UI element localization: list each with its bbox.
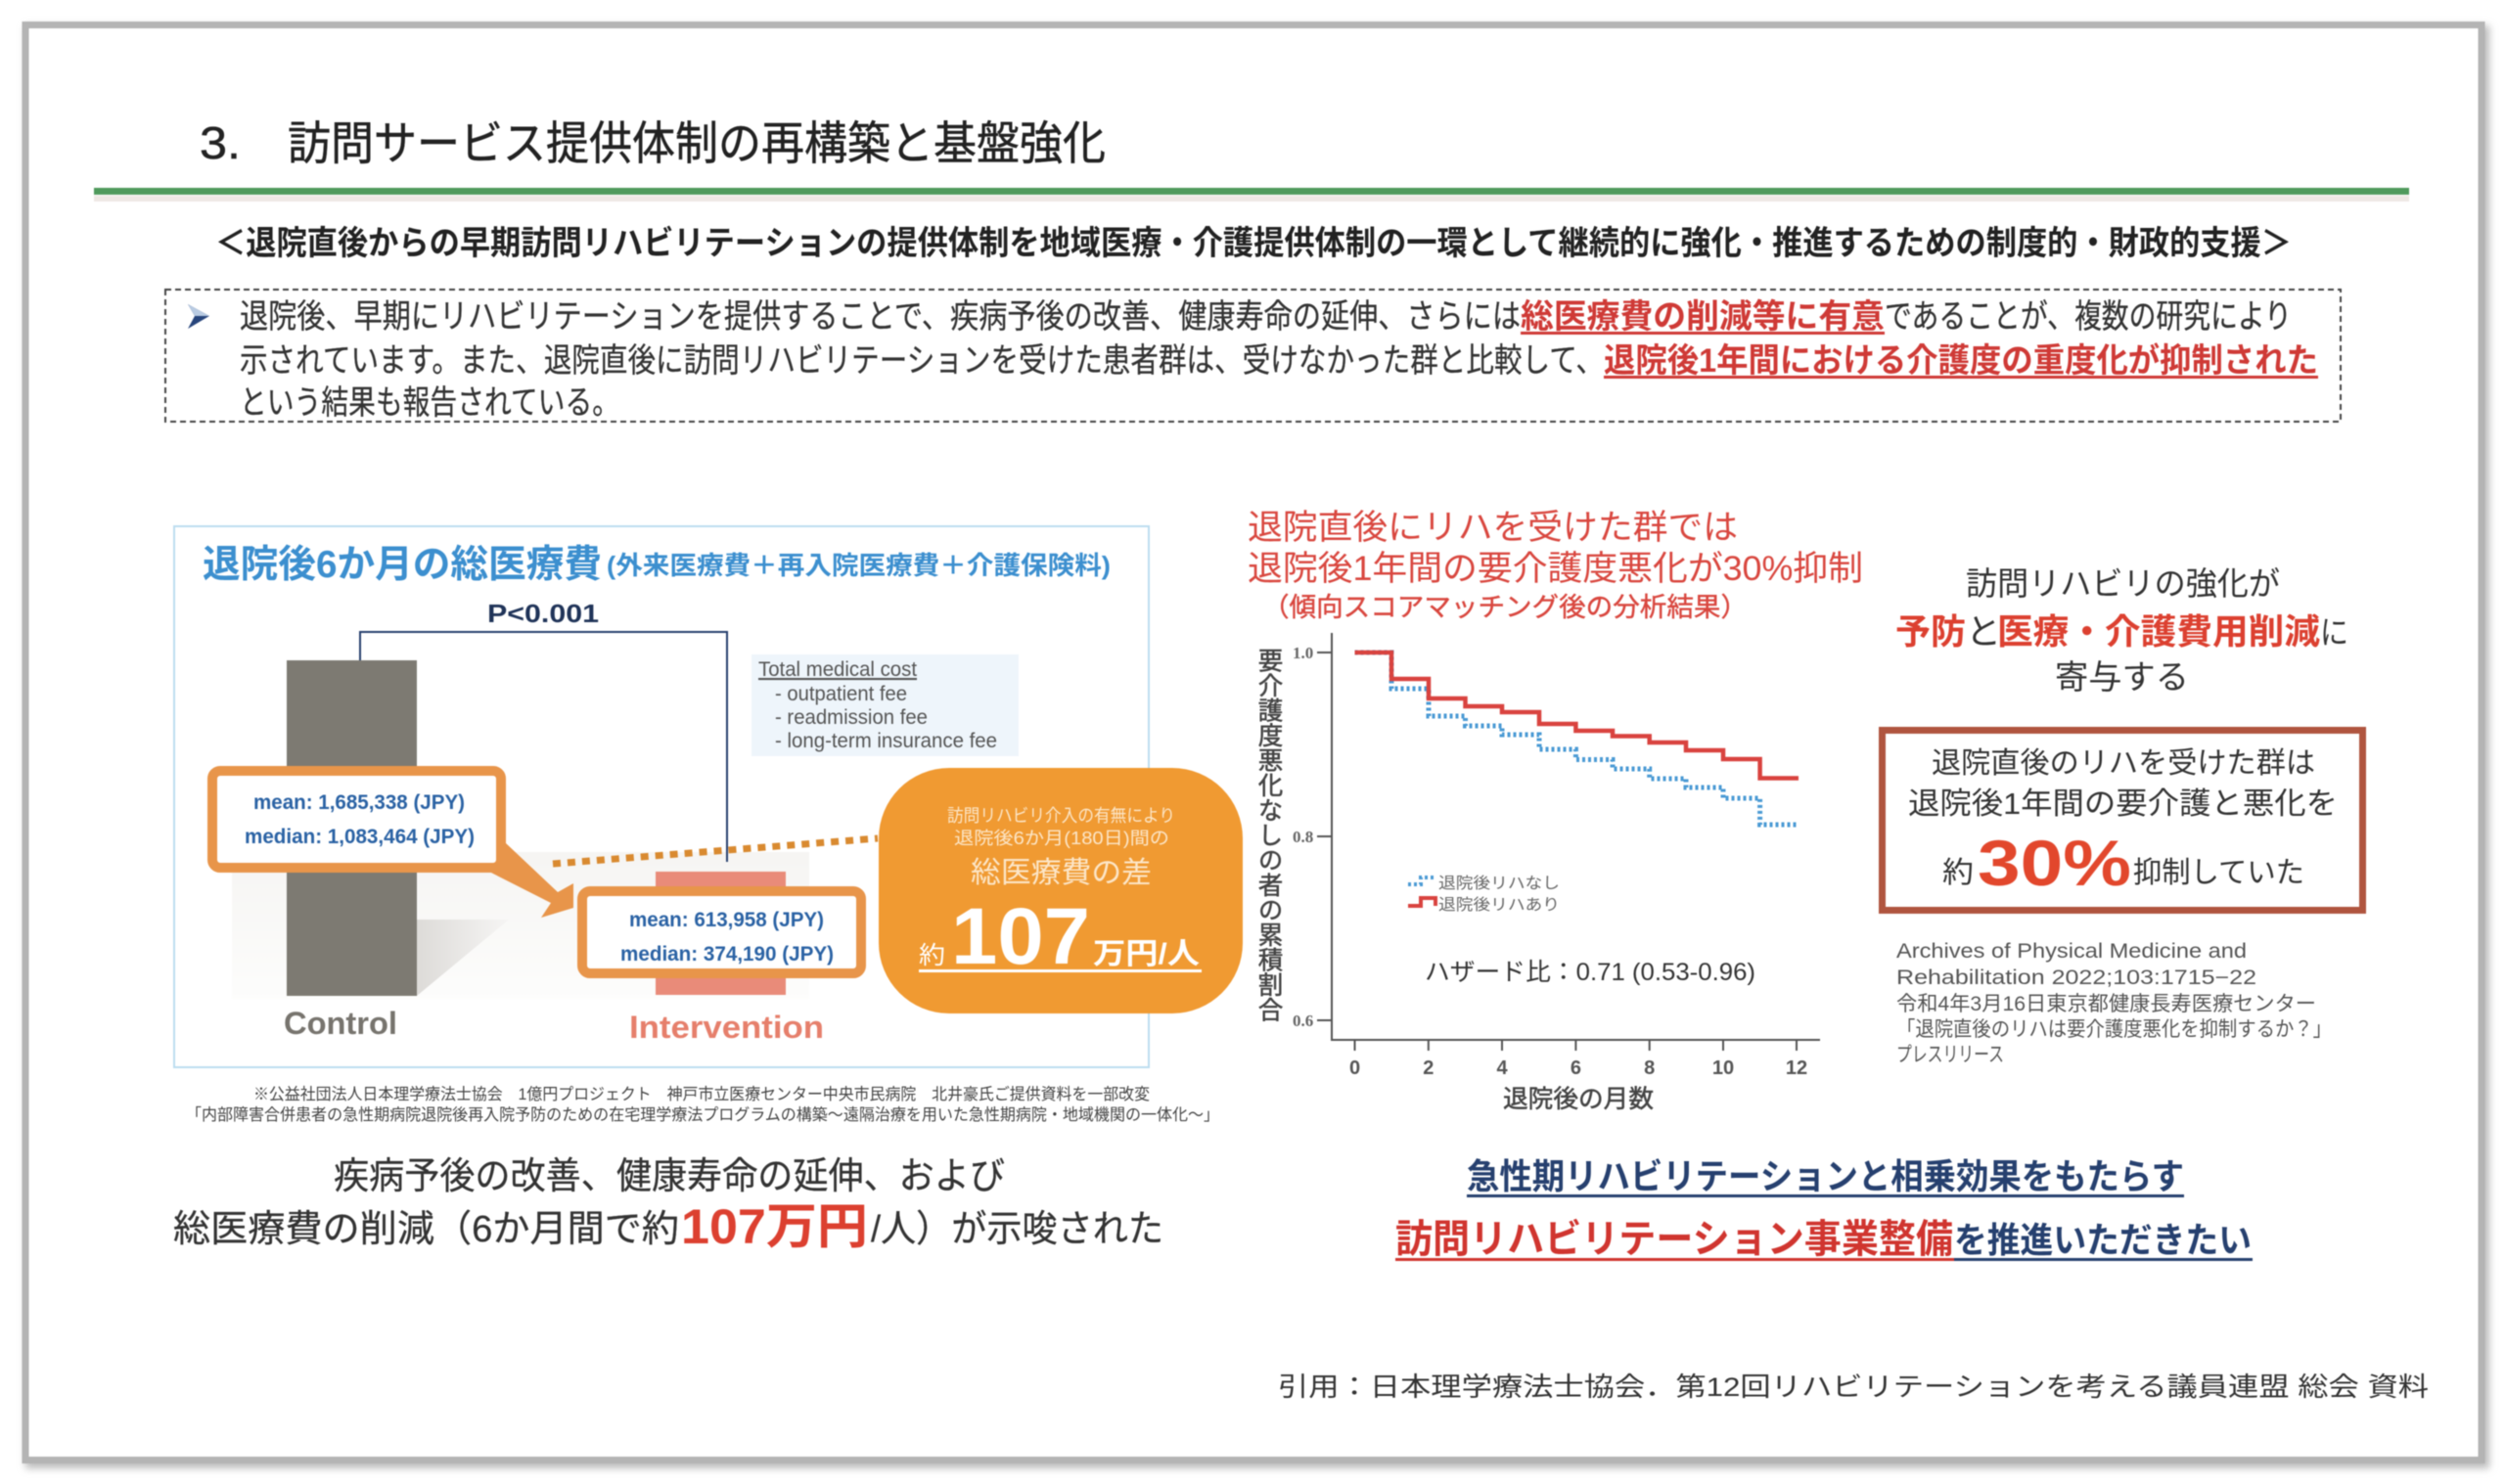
right message: 寄与する: [2055, 659, 2189, 697]
summary text: [240, 298, 2318, 422]
curve: no rehabilitation: [1354, 652, 1799, 825]
icon: bullet arrow: [188, 304, 209, 329]
green title rule: [94, 188, 2409, 202]
callout: 30 percent: 抑制していた: [2133, 857, 2304, 889]
callout: cost difference: 総医療費の差: [971, 857, 1152, 889]
x tick labels: 12: [1786, 1057, 1807, 1079]
chart heading: 退院直後にリハを受けた群では: [1248, 509, 1738, 547]
x tick labels: [1349, 1057, 1807, 1079]
source note: 「内部障害合併患者の急性期病院退院後再入院予防のための在宅理学療法プログラムの構築～遠隔治療を用いた急性期病院・地域機関の一体化～」: [186, 1105, 1219, 1124]
citation: 引用：日本理学療法士協会．第12回リハビリテーションを考える議員連盟 総会 資料: [1278, 1372, 2429, 1402]
y axis label: 要介護度悪化なしの者の累積割合: [1254, 648, 1283, 1021]
summary text: であることが、複数の研究により: [1885, 298, 2292, 336]
references: 令和4年3月16日東京都健康長寿医療センター: [1896, 993, 2316, 1015]
callout: 30 percent: 30%: [1978, 827, 2131, 899]
callout: cost difference: [879, 768, 1243, 1013]
x axis label: 退院後の月数: [1503, 1086, 1654, 1113]
panel: care-level survival chart: [1248, 509, 1863, 1113]
p value: P<0.001: [487, 599, 599, 628]
callout: 30 percent: 退院後1年間の要介護と悪化を: [1908, 787, 2338, 821]
chart heading: 退院後1年間の要介護度悪化が30%抑制: [1248, 550, 1863, 588]
right message: 医療・介護費用削減: [1997, 611, 2320, 652]
callout: cost difference: 訪問リハビリ介入の有無により: [947, 806, 1175, 826]
right message: 訪問リハビリの強化が: [1966, 565, 2280, 602]
panel: total medical cost chart: [174, 526, 1243, 1067]
panel heading: [203, 544, 1111, 586]
conclusion: left: [173, 1156, 1163, 1254]
callout: 30 percent: 約: [1942, 857, 1974, 889]
conclusion: right: を推進いただきたい: [1954, 1220, 2252, 1260]
summary text: 示されています。また、退院直後に訪問リハビリテーションを受けた患者群は、受けなかった群と比較して、: [240, 342, 1604, 380]
y tick labels: 1.0: [1293, 644, 1313, 662]
conclusion: right: 急性期リハビリテーションと相乗効果をもたらす: [1467, 1156, 2184, 1196]
conclusion: left: 疾病予後の改善、健康寿命の延伸、および: [334, 1156, 1005, 1197]
summary text: 退院後1年間における介護度の重度化が抑制された: [1604, 341, 2318, 380]
significance bracket: [360, 632, 727, 862]
callout: 30 percent: [1883, 730, 2362, 910]
panel heading: 退院後6か月の総医療費: [203, 544, 602, 586]
summary text: 総医療費の削減等に有意: [1521, 298, 1885, 336]
conclusion: right: [1395, 1156, 2253, 1261]
conclusion: left: 107万円: [681, 1199, 868, 1254]
legend: 退院後リハなし: [1438, 875, 1560, 892]
callout: control values: median: 1,083,464 (JPY): [245, 826, 475, 848]
callout arrow: [487, 843, 573, 918]
legend: [1408, 875, 1560, 914]
callout: 30 percent: 退院直後のリハを受けた群は: [1932, 747, 2315, 780]
conclusion: right: 訪問リハビリテーション事業整備: [1395, 1218, 1953, 1261]
source note: ※公益社団法人日本理学療法士協会 1億円プロジェクト 神戸市立医療センター中央市民病院 北井豪氏ご提供資料を一部改変: [253, 1085, 1150, 1103]
floor shading: [232, 852, 809, 999]
x tick labels: 10: [1712, 1057, 1734, 1079]
dotted connector: [553, 838, 878, 864]
callout: intervention values: mean: 613,958 (JPY): [629, 909, 824, 931]
callout: cost difference: 約: [919, 942, 945, 969]
legend: total medical cost: Total medical cost: [758, 658, 917, 681]
callout: cost difference: 107: [951, 892, 1090, 981]
legend: total medical cost: - long-term insurance fee: [775, 730, 997, 752]
right message: 予防: [1895, 611, 1966, 652]
callout: cost difference: 退院後6か月(180日)間の: [954, 829, 1169, 848]
right message: と: [1966, 611, 2001, 652]
chart heading: [1248, 509, 1863, 622]
legend: total medical cost: [752, 654, 1019, 756]
bar label: intervention: Intervention: [629, 1010, 824, 1045]
bar: control: [287, 660, 417, 996]
legend: total medical cost: - outpatient fee: [775, 683, 907, 705]
references: Archives of Physical Medicine and: [1896, 940, 2247, 963]
references: プレスリリース: [1896, 1044, 2004, 1066]
x tick labels: 8: [1644, 1057, 1655, 1079]
callout: intervention values: [582, 891, 861, 973]
bar label: control: Control: [284, 1006, 397, 1041]
title: 3.: [200, 117, 241, 168]
x tick labels: 0: [1349, 1057, 1360, 1079]
callout: control values: [212, 771, 501, 868]
callout: intervention values: median: 374,190 (JPY): [620, 943, 834, 966]
x tick labels: 6: [1571, 1057, 1581, 1079]
hazard ratio: ハザード比：0.71 (0.53-0.96): [1425, 959, 1755, 986]
x tick labels: 4: [1496, 1057, 1508, 1079]
summary text: という結果も報告されている。: [240, 384, 619, 422]
right message: に: [2320, 614, 2348, 651]
source note: [186, 1085, 1219, 1124]
bar: intervention: [656, 872, 786, 995]
y tick labels: [1293, 644, 1313, 1030]
legend: total medical cost: - readmission fee: [775, 706, 928, 729]
conclusion: left: 総医療費の削減（6か月間で約: [173, 1209, 679, 1250]
x tick labels: 2: [1423, 1057, 1434, 1079]
references: [1896, 940, 2332, 1066]
title: 訪問サービス提供体制の再構築と基盤強化: [288, 117, 1106, 169]
references: 「退院直後のリハは要介護度悪化を抑制するか？」: [1896, 1018, 2332, 1041]
subtitle: ＜退院直後からの早期訪問リハビリテーションの提供体制を地域医療・介護提供体制の一環として継続的に強化・推進するための制度的・財政的支援＞: [215, 225, 2292, 262]
summary text: 退院後、早期にリハビリテーションを提供することで、疾病予後の改善、健康寿命の延伸、さらには: [240, 298, 1521, 336]
axes: [1317, 633, 1820, 1051]
y tick labels: 0.6: [1293, 1012, 1313, 1030]
references: Rehabilitation 2022;103:1715−22: [1896, 967, 2256, 989]
legend: 退院後リハあり: [1438, 896, 1560, 914]
callout: control values: mean: 1,685,338 (JPY): [253, 791, 465, 814]
callout: cost difference: 万円/人: [1093, 938, 1200, 970]
y tick labels: 0.8: [1293, 828, 1313, 846]
conclusion: left: /人）が示唆された: [871, 1209, 1163, 1250]
panel heading: (外来医療費＋再入院医療費＋介護保険料): [607, 551, 1111, 580]
right message: [1895, 565, 2348, 697]
curve: with rehabilitation: [1354, 652, 1799, 779]
chart heading: （傾向スコアマッチング後の分析結果）: [1262, 593, 1748, 622]
summary box: [165, 290, 2341, 422]
